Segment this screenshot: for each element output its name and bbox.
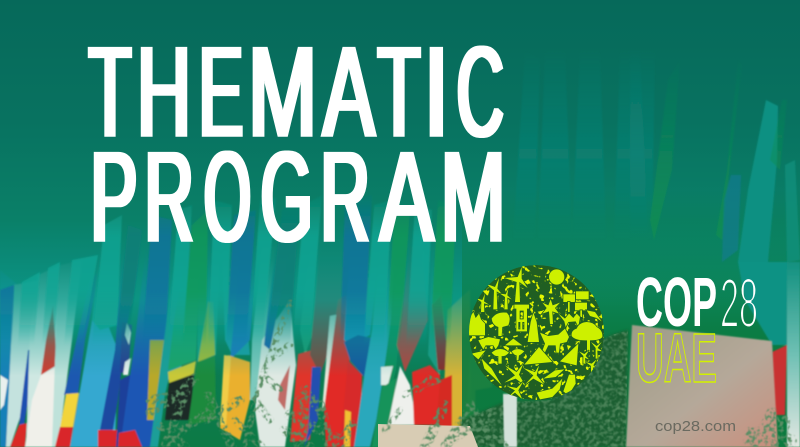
title line 2: O — [204, 126, 251, 269]
icon: wind turbines top — [476, 267, 528, 312]
icon: palm — [542, 299, 560, 324]
plants foreground — [144, 299, 798, 447]
faded flag tips — [0, 195, 456, 345]
icon: cloud tree — [572, 322, 602, 352]
title line 1: C — [457, 21, 504, 164]
icon: sun — [549, 269, 564, 285]
title line 2: R — [144, 126, 194, 269]
title line 2: M — [441, 126, 506, 269]
stone post middle — [503, 394, 517, 447]
icon: solar panels — [563, 291, 589, 317]
title line 1: T — [378, 21, 420, 164]
title line 1: A — [323, 21, 375, 164]
icon: mountain — [524, 347, 552, 365]
website: cop28.com — [655, 419, 736, 435]
title line 2: A — [380, 126, 434, 269]
icon: left building — [469, 312, 485, 335]
COP28 biodiversity emblem — [469, 265, 604, 400]
icon: buffalo — [478, 337, 500, 349]
title line 1: M — [248, 21, 317, 164]
flags row — [0, 247, 553, 447]
title line 1: I — [424, 21, 449, 164]
grey sign board — [626, 325, 778, 447]
right flags — [513, 50, 800, 447]
icon: tree left — [492, 312, 510, 336]
UAE text: UAE — [636, 319, 717, 397]
title line 2: P — [90, 126, 137, 269]
icon: grass mound — [505, 339, 522, 345]
green field behind logo — [462, 190, 800, 447]
title line 2: R — [320, 126, 370, 269]
stone planter left — [378, 424, 478, 447]
icon: woman — [528, 313, 539, 342]
foliage centre right — [457, 330, 629, 447]
title line 1: T — [89, 21, 131, 164]
icon: small trees — [492, 349, 524, 364]
COP text: COP — [636, 263, 717, 341]
icon: bottom turbines — [504, 364, 544, 399]
icon: right turbines — [579, 342, 602, 375]
icon: sail — [560, 344, 578, 365]
banner: thematic program COP28: 28 — [720, 264, 758, 342]
icon: camel — [558, 314, 580, 327]
icon: fish and birds — [472, 350, 576, 399]
COP28 UAE logotype — [636, 263, 758, 397]
title line 2: G — [261, 126, 313, 269]
icon: tower building — [514, 305, 529, 331]
icon: bird right — [587, 310, 602, 321]
icon: horse — [540, 329, 569, 354]
title — [89, 21, 505, 269]
title line 1: H — [137, 21, 191, 164]
title line 1: E — [199, 21, 243, 164]
